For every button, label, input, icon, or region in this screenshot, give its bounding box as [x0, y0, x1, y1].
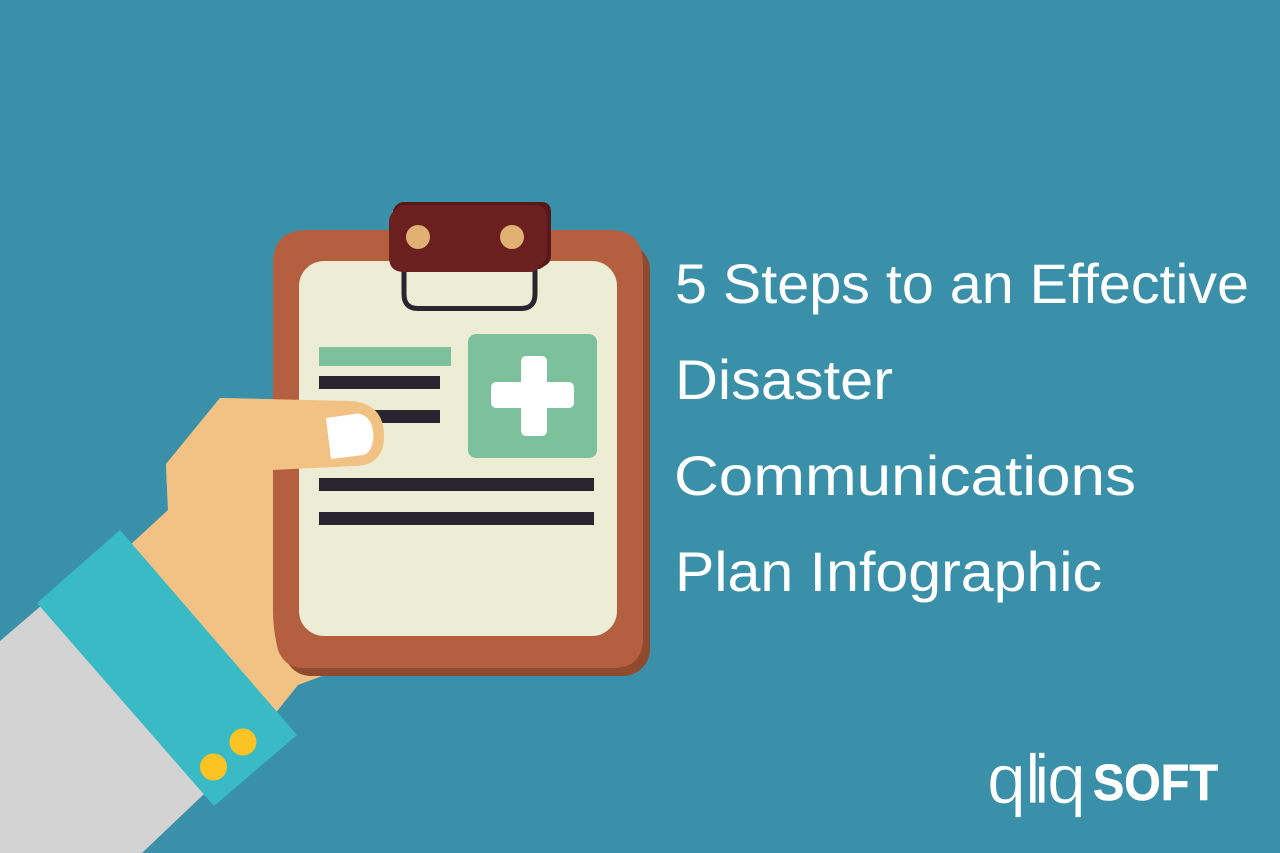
logo: qliqSOFT: [987, 740, 1218, 818]
text line 2: [319, 410, 440, 423]
text line 3: [319, 478, 594, 491]
clipboard shadow: [284, 243, 650, 676]
icon: clipboard: [273, 202, 650, 676]
text line 4: [319, 512, 594, 525]
paper sheet: [299, 261, 617, 636]
clipboard board: [273, 230, 643, 668]
cuff button upper: [230, 728, 256, 756]
icon: medical cross: [468, 334, 597, 458]
green heading bar: [319, 347, 451, 366]
icon: shirt cuff: [37, 530, 297, 806]
logo wordmark bold: SOFT: [1093, 754, 1218, 811]
icon: thumb over the clipboard: [166, 398, 384, 560]
clip back edge: [393, 202, 551, 269]
title line 3: Communications: [674, 444, 1136, 507]
icon: palm behind the clipboard: [130, 398, 322, 720]
text line 1: [319, 376, 440, 389]
clip rivet left: [406, 225, 430, 249]
cuff button lower: [200, 754, 227, 780]
title line 4: Plan Infographic: [675, 540, 1102, 603]
thumb: [166, 398, 384, 560]
icon: shirt sleeve: [0, 605, 215, 853]
clip rivet right: [500, 225, 524, 249]
white cross: [491, 356, 574, 436]
clip ring: [404, 265, 535, 308]
thumbnail: [326, 414, 374, 459]
title line 2: Disaster: [675, 348, 893, 411]
title line 1: 5 Steps to an Effective: [675, 252, 1249, 315]
cuff band: [37, 530, 297, 806]
green square: [468, 334, 597, 458]
logo wordmark light: qliq: [987, 740, 1086, 818]
clip front: [389, 205, 547, 272]
title: [674, 252, 1249, 603]
